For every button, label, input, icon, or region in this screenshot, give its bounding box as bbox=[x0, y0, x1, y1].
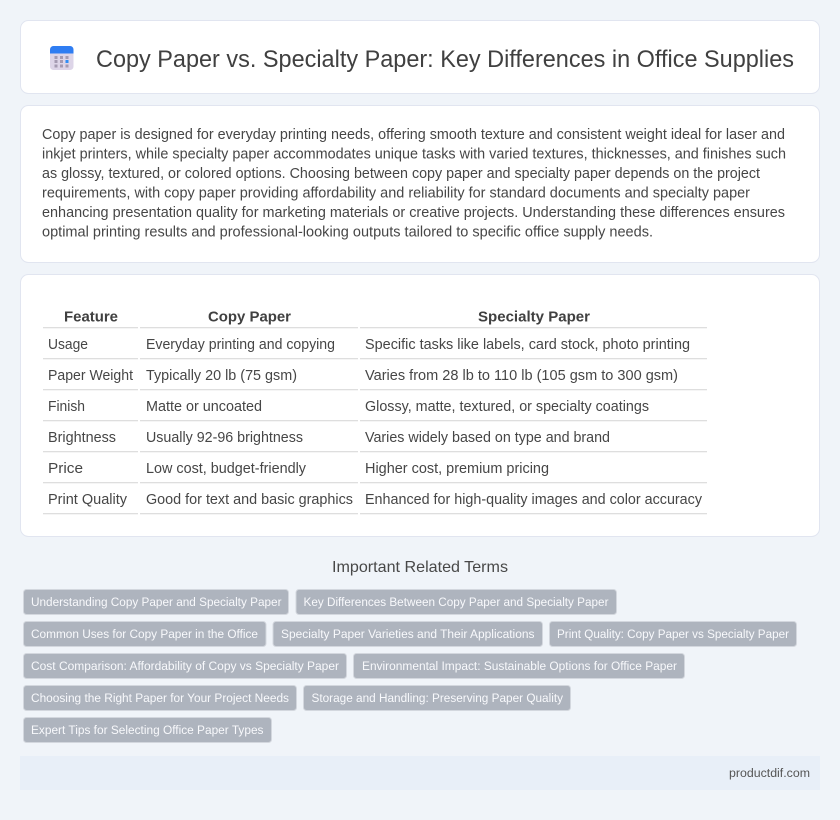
tag: Cost Comparison: Affordability of Copy vs Specialty Paper bbox=[31, 659, 339, 673]
panel: comparison table bbox=[20, 274, 820, 536]
tag bbox=[24, 686, 296, 710]
row: price: Price bbox=[48, 461, 83, 477]
tag bbox=[24, 590, 288, 614]
row: usage: Specific tasks like labels, card stock, photo printing bbox=[365, 337, 690, 353]
paragraph: as glossy, textured, or colored options. Choosing between copy paper and specialty paper depends on the project bbox=[42, 166, 760, 182]
row: finish: Finish bbox=[48, 399, 85, 415]
paragraph: inkjet printers, while specialty paper accommodates unique tasks with varied textures, thicknesses, and finishes such bbox=[42, 146, 786, 162]
tag bbox=[304, 686, 570, 710]
panel: introduction text bbox=[20, 106, 820, 262]
tag: Specialty Paper Varieties and Their Applications bbox=[281, 627, 534, 641]
row: paper weight bbox=[48, 368, 678, 384]
table header: Copy Paper bbox=[208, 308, 291, 326]
paragraph: enhancing presentation quality for marketing materials or creative projects. Understanding these differences ensures bbox=[42, 205, 785, 221]
tag: Understanding Copy Paper and Specialty Paper bbox=[31, 595, 282, 609]
heading: related terms: Important Related Terms bbox=[332, 559, 508, 576]
tag bbox=[24, 654, 346, 678]
row: price: Low cost, budget-friendly bbox=[146, 461, 307, 477]
table header: Feature bbox=[64, 308, 118, 326]
row: print quality: Enhanced for high-quality images and color accuracy bbox=[365, 492, 703, 508]
row: finish bbox=[48, 399, 649, 415]
panel: header bbox=[20, 20, 820, 94]
tag bbox=[354, 654, 684, 678]
table header bbox=[64, 308, 590, 326]
footer source text: productdif.com bbox=[729, 766, 810, 780]
tag: Environmental Impact: Sustainable Options for Office Paper bbox=[362, 659, 677, 673]
row: usage bbox=[48, 337, 690, 353]
tag bbox=[24, 622, 266, 646]
row: finish: Glossy, matte, textured, or specialty coatings bbox=[365, 399, 649, 415]
icon: calendar bbox=[50, 46, 74, 70]
row: paper weight: Varies from 28 lb to 110 lb (105 gsm to 300 gsm) bbox=[365, 368, 678, 384]
tag: Key Differences Between Copy Paper and Specialty Paper bbox=[304, 595, 608, 609]
row: paper weight: Typically 20 lb (75 gsm) bbox=[146, 368, 297, 384]
footer bbox=[20, 756, 820, 790]
paragraph: requirements, with copy paper providing affordability and reliability for standard documents and specialty paper bbox=[42, 186, 750, 202]
title: Copy Paper vs. Specialty Paper: Key Differences in Office Supplies bbox=[96, 46, 794, 73]
tag: Choosing the Right Paper for Your Project Needs bbox=[31, 691, 289, 705]
row: print quality: Print Quality bbox=[48, 492, 128, 508]
tag bbox=[24, 718, 272, 742]
row: brightness: Varies widely based on type and brand bbox=[365, 430, 610, 446]
tag bbox=[273, 622, 542, 646]
row: price bbox=[48, 461, 549, 477]
tag: Storage and Handling: Preserving Paper Quality bbox=[312, 691, 564, 705]
row: usage: Everyday printing and copying bbox=[146, 337, 335, 353]
table header: Specialty Paper bbox=[478, 308, 590, 326]
tag: Common Uses for Copy Paper in the Office bbox=[31, 627, 258, 641]
tag: Expert Tips for Selecting Office Paper Types bbox=[31, 723, 264, 737]
row: brightness: Usually 92-96 brightness bbox=[146, 430, 303, 446]
paragraph bbox=[42, 127, 786, 240]
row: print quality: Good for text and basic graphics bbox=[146, 492, 353, 508]
paragraph: Copy paper is designed for everyday printing needs, offering smooth texture and consistent weight ideal for laser and bbox=[42, 127, 785, 143]
row: usage: Usage bbox=[48, 337, 88, 353]
row: paper weight: Paper Weight bbox=[48, 368, 133, 384]
tag bbox=[296, 590, 616, 614]
tag bbox=[550, 622, 796, 646]
tag list: related terms bbox=[24, 590, 796, 742]
row: brightness bbox=[48, 430, 610, 446]
tag: Print Quality: Copy Paper vs Specialty Paper bbox=[557, 627, 789, 641]
row: brightness: Brightness bbox=[48, 430, 116, 446]
paragraph: optimal printing results and professional-looking outputs tailored to specific office supply needs. bbox=[42, 224, 653, 240]
row: print quality bbox=[48, 492, 703, 508]
row: price: Higher cost, premium pricing bbox=[365, 461, 549, 477]
row: finish: Matte or uncoated bbox=[146, 399, 262, 415]
